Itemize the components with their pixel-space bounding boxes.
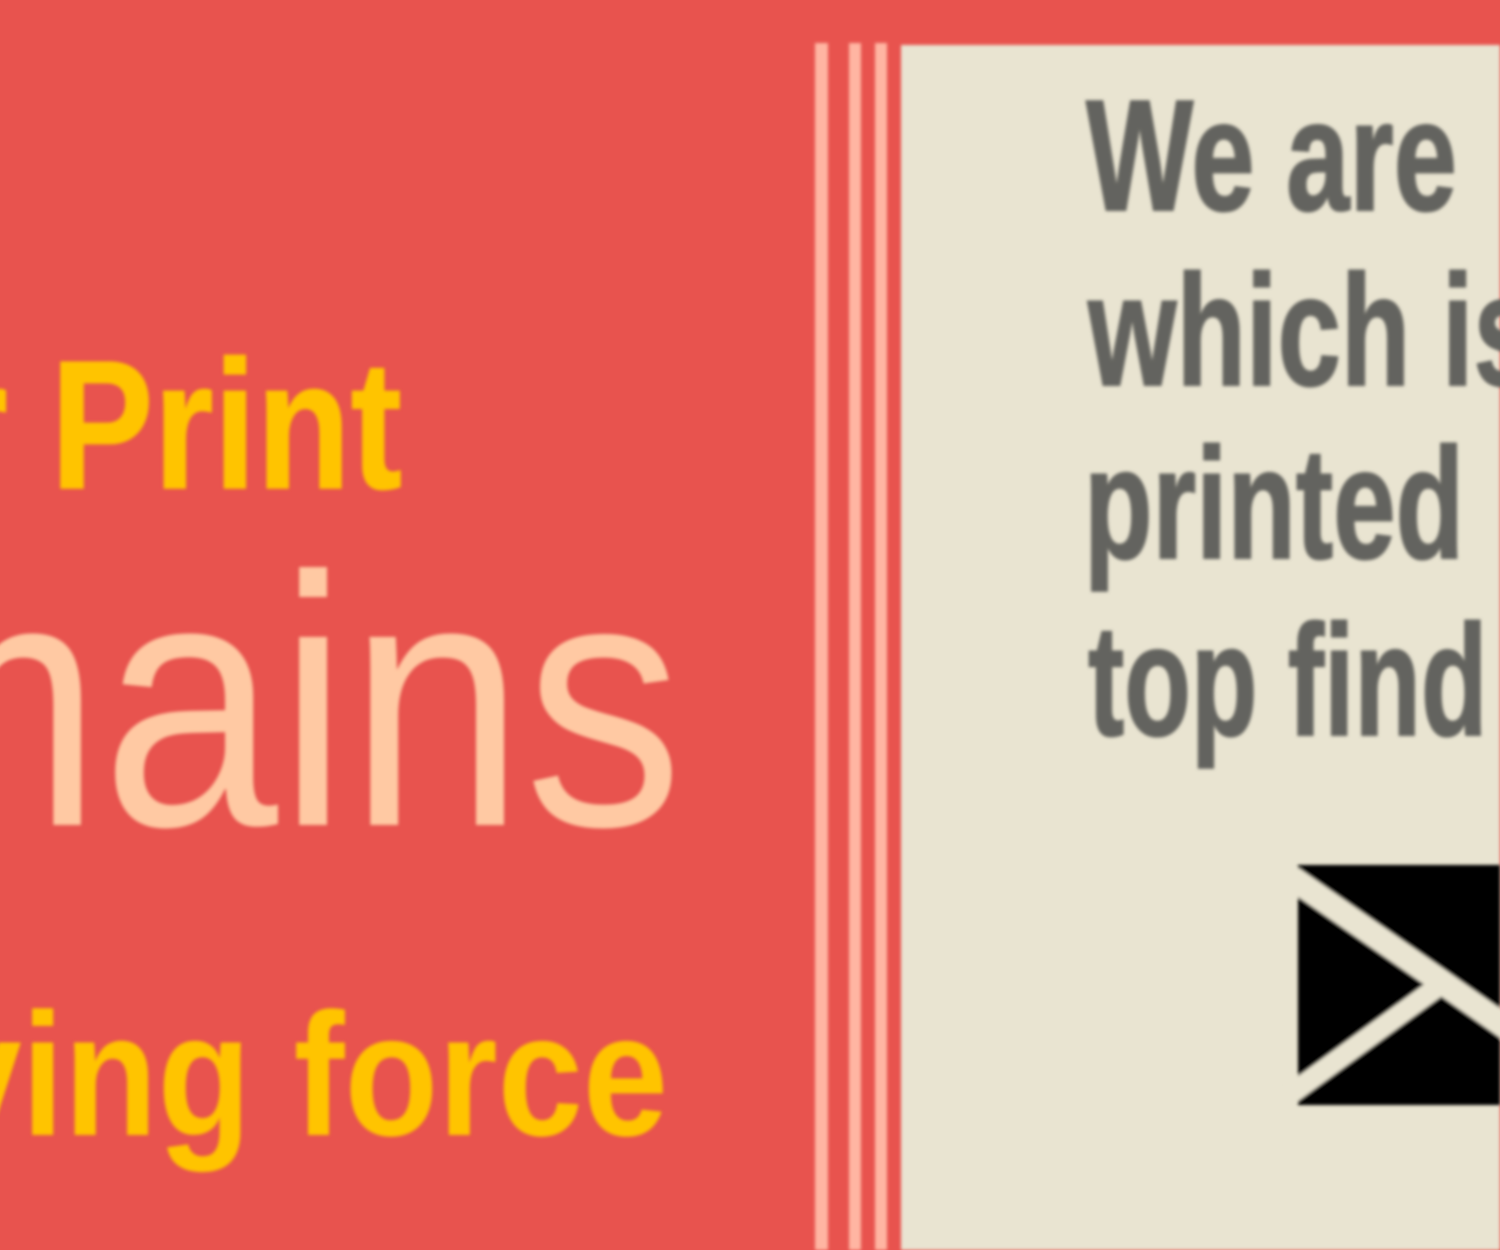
- panel: cream text panel: [901, 45, 1500, 1250]
- heading: red panel message: [0, 323, 683, 1172]
- body line 3: printed: [1084, 416, 1464, 593]
- body line 1: We are: [1086, 68, 1457, 244]
- divider: three vertical stripes: [815, 43, 887, 1250]
- body line 4: top find: [1088, 592, 1488, 769]
- text block: cream panel body copy: [1084, 68, 1500, 769]
- icon: envelope: [1292, 865, 1500, 1105]
